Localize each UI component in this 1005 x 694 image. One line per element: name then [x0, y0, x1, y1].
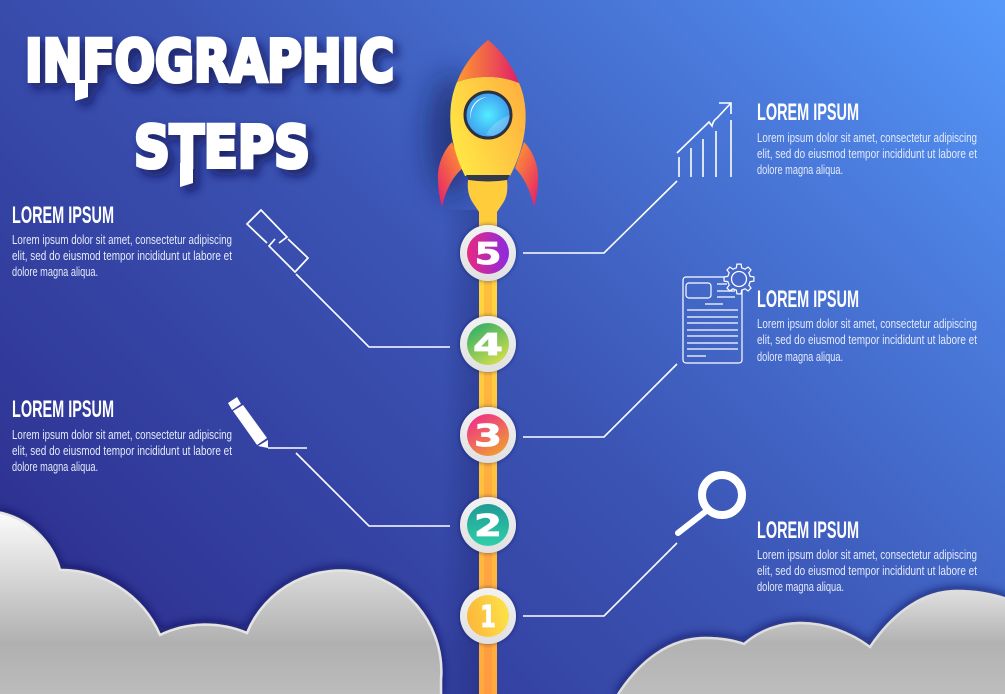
- icon: pencil: [228, 397, 307, 448]
- rocket: [428, 40, 538, 228]
- step 4 badge: 4: [473, 328, 503, 363]
- text block: right top: [757, 99, 977, 177]
- text block: left bottom: Lorem ipsum dolor sit amet, consectetur adipiscing: [12, 428, 232, 442]
- nozzle: [468, 180, 507, 228]
- nozzle band: [466, 175, 510, 182]
- left fin: [438, 142, 463, 207]
- icon: magnifier: [678, 475, 742, 533]
- text block: left top: elit, sed do eiusmod tempor incididunt ut labore et: [12, 249, 232, 263]
- text block: right top: dolore magna aliqua.: [757, 163, 843, 177]
- icon: gear: [724, 264, 754, 294]
- text block: left bottom: elit, sed do eiusmod tempor incididunt ut labore et: [12, 444, 232, 458]
- text block: left top: LOREM IPSUM: [12, 202, 114, 229]
- step 2 badge: [460, 497, 516, 553]
- nose cone: [457, 40, 519, 83]
- text block: right bottom: dolore magna aliqua.: [757, 580, 844, 594]
- text block: right bottom: LOREM IPSUM: [757, 517, 859, 544]
- text block: left bottom: [12, 396, 232, 474]
- text block: right top: LOREM IPSUM: [757, 99, 859, 126]
- icon: document with gear: [683, 264, 754, 363]
- text block: right middle: [757, 286, 977, 364]
- connector lines: [296, 181, 677, 616]
- step 5 badge: 5: [474, 237, 502, 272]
- title: INFOGRAPHIC: [25, 27, 394, 95]
- text block: right bottom: [757, 517, 977, 594]
- step 4 badge: [460, 316, 516, 372]
- icon: growth chart: [677, 103, 731, 177]
- step 5 badge: [460, 225, 516, 281]
- text block: right middle: dolore magna aliqua.: [757, 350, 843, 364]
- left cloud: [0, 512, 441, 694]
- text block: left top: Lorem ipsum dolor sit amet, consectetur adipiscing: [12, 233, 232, 247]
- title: [25, 27, 394, 187]
- right fin: [515, 142, 538, 207]
- rocket trail column: [442, 205, 497, 694]
- text block: left bottom: LOREM IPSUM: [12, 396, 114, 423]
- step 1 badge: [460, 588, 516, 644]
- step 3 badge: 3: [474, 419, 502, 454]
- text block: left bottom: dolore magna aliqua.: [12, 460, 98, 474]
- text block: left top: [12, 202, 232, 279]
- step 3 badge: [460, 407, 516, 463]
- right cloud: [617, 591, 1005, 694]
- window: [465, 92, 511, 138]
- icon: chain link: [247, 210, 308, 272]
- step 2 badge: 2: [474, 509, 502, 544]
- text block: left top: dolore magna aliqua.: [12, 265, 98, 279]
- text block: right middle: LOREM IPSUM: [757, 286, 859, 313]
- rocket body: [450, 77, 526, 176]
- title: STEPS: [134, 113, 310, 181]
- step 1 badge: 1: [480, 600, 496, 635]
